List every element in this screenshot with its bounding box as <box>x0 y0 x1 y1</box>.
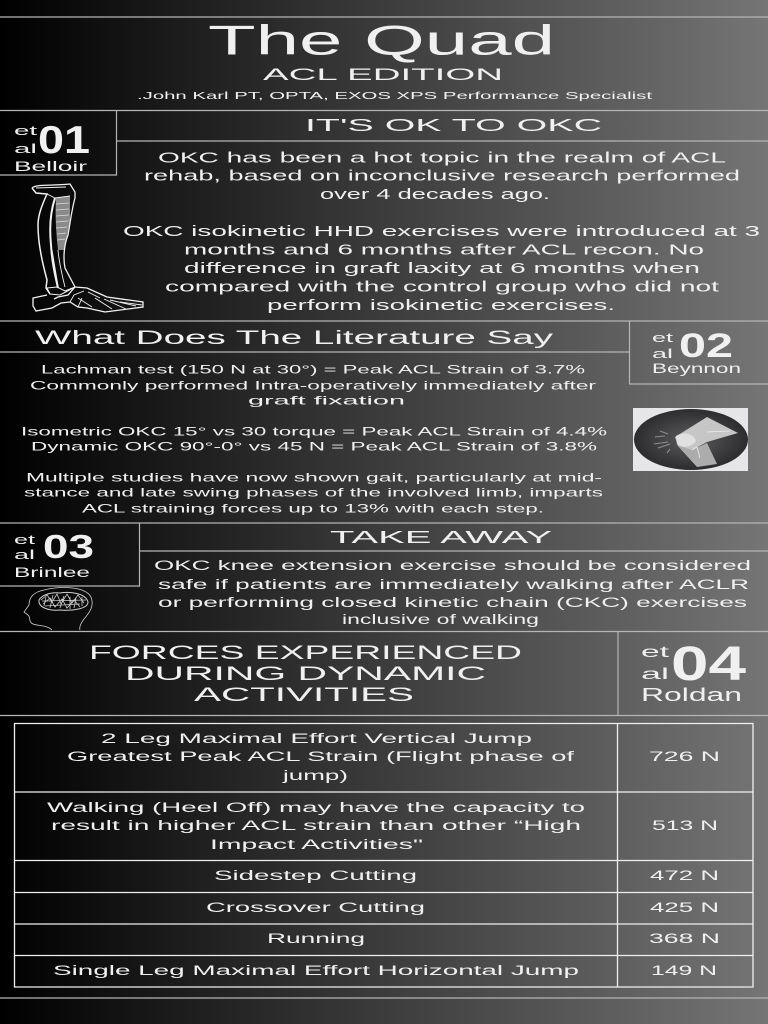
row: vertical jump: jump) <box>281 768 348 783</box>
author line: .John Karl PT, OPTA, EXOS XPS Performance Specialist <box>137 90 652 102</box>
text block: okc intro: months and 6 months after ACL recon. No <box>184 242 704 258</box>
row: crossover cutting: Crossover Cutting <box>206 900 425 915</box>
text block: literature findings: Lachman test (150 N at 30°) = Peak ACL Strain of 3.7% <box>41 362 586 376</box>
subtitle: ACL EDITION <box>263 65 503 84</box>
row: walking <box>47 800 718 852</box>
panel: study 03 badge: 03 <box>43 528 94 565</box>
panel: study 01 badge: et <box>14 123 38 138</box>
heading: it's ok to okc: IT'S OK TO OKC <box>305 115 602 135</box>
row: single leg horizontal jump: Single Leg Maximal Effort Horizontal Jump <box>53 963 579 978</box>
row: sidestep cutting <box>214 868 719 883</box>
title: The Quad <box>208 16 555 64</box>
panel: study 04 badge: al <box>641 666 669 683</box>
row: walking: 513 N <box>652 818 718 833</box>
heading: take away: TAKE AWAY <box>330 527 553 547</box>
row: walking: result in higher ACL strain than other “High <box>51 818 581 833</box>
panel: study 04 badge: et <box>641 644 670 661</box>
text block: okc intro: rehab, based on inconclusive research performed <box>144 168 740 184</box>
text block: literature findings: stance and late swing phases of the involved limb, imparts <box>24 486 603 500</box>
icon: head with brain <box>24 588 92 630</box>
row: running <box>267 931 720 946</box>
panel: study 03 badge: Brinlee <box>14 564 90 580</box>
text block: take away: inclusive of walking <box>342 612 539 627</box>
panel: study 04 badge: 04 <box>671 638 746 691</box>
text block: okc intro: OKC isokinetic HHD exercises were introduced at 3 <box>123 224 760 240</box>
text block: literature findings <box>21 362 608 516</box>
text block: take away: or performing closed kinetic chain (CKC) exercises <box>158 595 747 610</box>
row: vertical jump <box>67 731 720 783</box>
text block: okc intro: OKC has been a hot topic in the realm of ACL <box>158 150 726 166</box>
row: sidestep cutting: Sidestep Cutting <box>214 868 417 883</box>
icon: knee illustration <box>633 408 748 471</box>
panel: study 02 badge <box>652 327 741 376</box>
panel: study 03 badge: et <box>14 532 36 547</box>
panel: study 02 badge: Beynnon <box>652 360 741 376</box>
text block: literature findings: Isometric OKC 15° vs 30 torque = Peak ACL Strain of 4.4% <box>21 424 608 438</box>
row: crossover cutting <box>206 900 719 915</box>
panel: study 02 badge: et <box>652 330 674 345</box>
title <box>208 16 555 84</box>
panel: study 01 badge <box>14 119 90 174</box>
row: vertical jump: 2 Leg Maximal Effort Vertical Jump <box>101 731 532 746</box>
panel: study 02 badge: al <box>652 346 673 361</box>
heading: what does the literature say: What Does The Literature Say <box>35 327 553 349</box>
icon: leg and foot bones <box>32 184 143 312</box>
text block: literature findings: Multiple studies have now shown gait, particularly at mid- <box>26 470 602 484</box>
heading: forces experienced during dynamic activities: FORCES EXPERIENCED <box>89 642 522 664</box>
heading: forces experienced during dynamic activities: DURING DYNAMIC <box>125 663 486 685</box>
text block: literature findings: Commonly performed Intra-operatively immediately after <box>30 378 596 392</box>
heading: forces experienced during dynamic activities <box>89 642 522 706</box>
text block: okc intro: perform isokinetic exercises. <box>267 298 615 314</box>
panel: study 01 badge: 01 <box>38 119 90 162</box>
panel: study 02 badge: 02 <box>679 327 733 365</box>
row: vertical jump: Greatest Peak ACL Strain (Flight phase of <box>67 749 574 764</box>
row: vertical jump: 726 N <box>649 749 720 764</box>
table: forces by activity <box>14 724 753 987</box>
panel: study 03 badge: al <box>14 547 35 562</box>
text block: okc intro: over 4 decades ago. <box>320 187 550 203</box>
panel: study 01 badge: Belloir <box>14 159 88 174</box>
text block: literature findings: ACL straining forces up to 13% with each step. <box>82 502 544 516</box>
heading: forces experienced during dynamic activities: ACTIVITIES <box>194 684 414 706</box>
text block: literature findings: graft fixation <box>248 394 405 408</box>
row: single leg horizontal jump <box>53 963 717 978</box>
text block: okc intro: difference in graft laxity at 6 months when <box>184 261 700 277</box>
text block: take away <box>154 558 751 627</box>
row: running: 368 N <box>649 931 720 946</box>
text block: take away: safe if patients are immediately walking after ACLR <box>158 577 749 592</box>
panel: study 01 badge: al <box>14 141 37 156</box>
text block: literature findings: Dynamic OKC 90°-0° vs 45 N = Peak ACL Strain of 3.8% <box>31 440 598 454</box>
panel: study 03 badge <box>14 528 94 580</box>
row: single leg horizontal jump: 149 N <box>651 963 717 978</box>
panel: study 04 badge <box>641 638 746 705</box>
text block: okc intro <box>123 150 760 314</box>
row: sidestep cutting: 472 N <box>650 868 719 883</box>
row: walking: Impact Activities" <box>210 837 423 852</box>
row: walking: Walking (Heel Off) may have the capacity to <box>47 800 585 815</box>
text block: take away: OKC knee extension exercise should be considered <box>154 558 751 573</box>
row: running: Running <box>267 931 365 946</box>
panel: study 04 badge: Roldan <box>641 685 742 705</box>
text block: okc intro: compared with the control group who did not <box>165 280 719 296</box>
row: crossover cutting: 425 N <box>650 900 719 915</box>
